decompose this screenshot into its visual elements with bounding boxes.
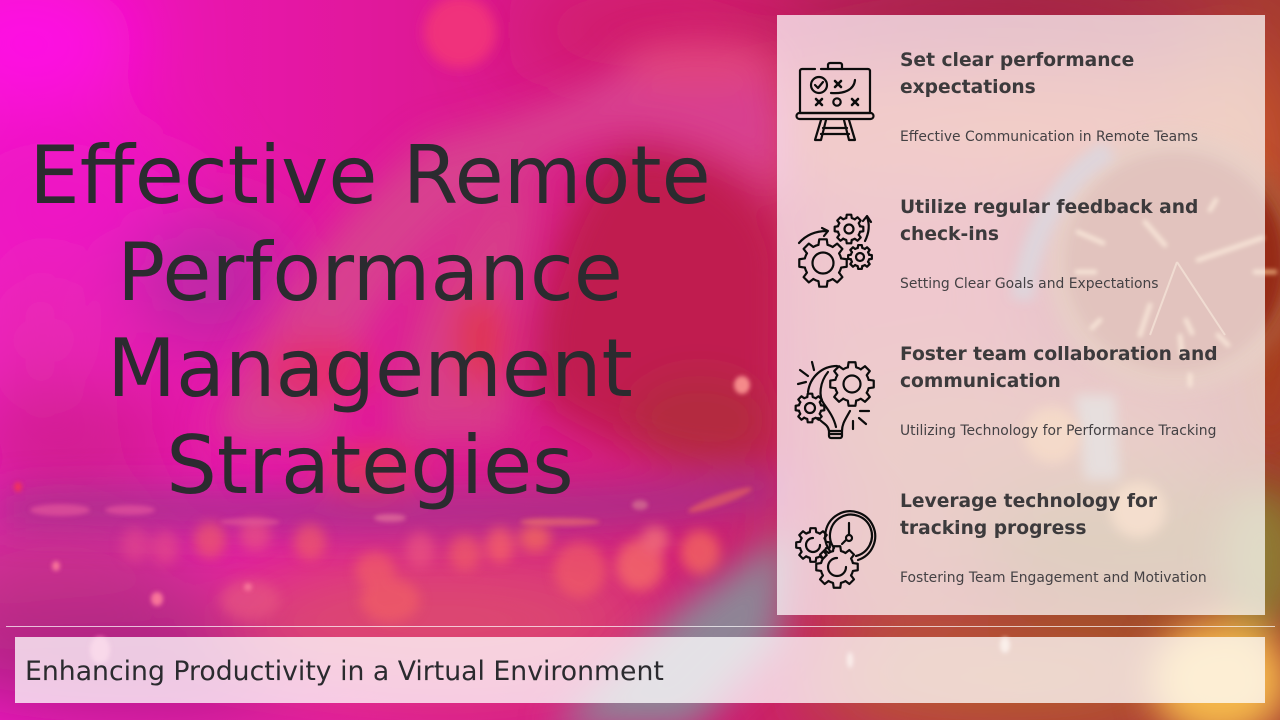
blurred wristwatch xyxy=(1022,134,1280,538)
subtitle bar xyxy=(15,637,1265,703)
icon: gears with arrows xyxy=(796,214,873,428)
item: feedback and check-ins xyxy=(796,197,1198,428)
title: Effective Remote Performance Management Strategies xyxy=(29,129,711,512)
subtext: Utilizing Technology for Performance Tracking xyxy=(900,423,1216,439)
icon: lightbulb with gears xyxy=(794,360,875,440)
icon: strategy board xyxy=(795,62,875,142)
divider line xyxy=(6,626,1275,627)
item: technology tracking xyxy=(795,491,1207,589)
heading: Leverage technology for tracking progress xyxy=(900,491,1157,539)
item: team collaboration xyxy=(794,344,1218,440)
panel: strategies xyxy=(777,15,1265,615)
heading: Foster team collaboration and communication xyxy=(900,344,1218,392)
heading: Utilize regular feedback and check-ins xyxy=(900,197,1198,245)
subtext: Fostering Team Engagement and Motivation xyxy=(900,570,1207,586)
item: performance expectations xyxy=(795,50,1198,145)
icon: clock with gears xyxy=(795,510,876,589)
heading: Set clear performance expectations xyxy=(900,50,1134,98)
subtext: Setting Clear Goals and Expectations xyxy=(900,276,1159,292)
subtitle: Enhancing Productivity in a Virtual Environment xyxy=(25,656,664,687)
subtext: Effective Communication in Remote Teams xyxy=(900,129,1198,145)
